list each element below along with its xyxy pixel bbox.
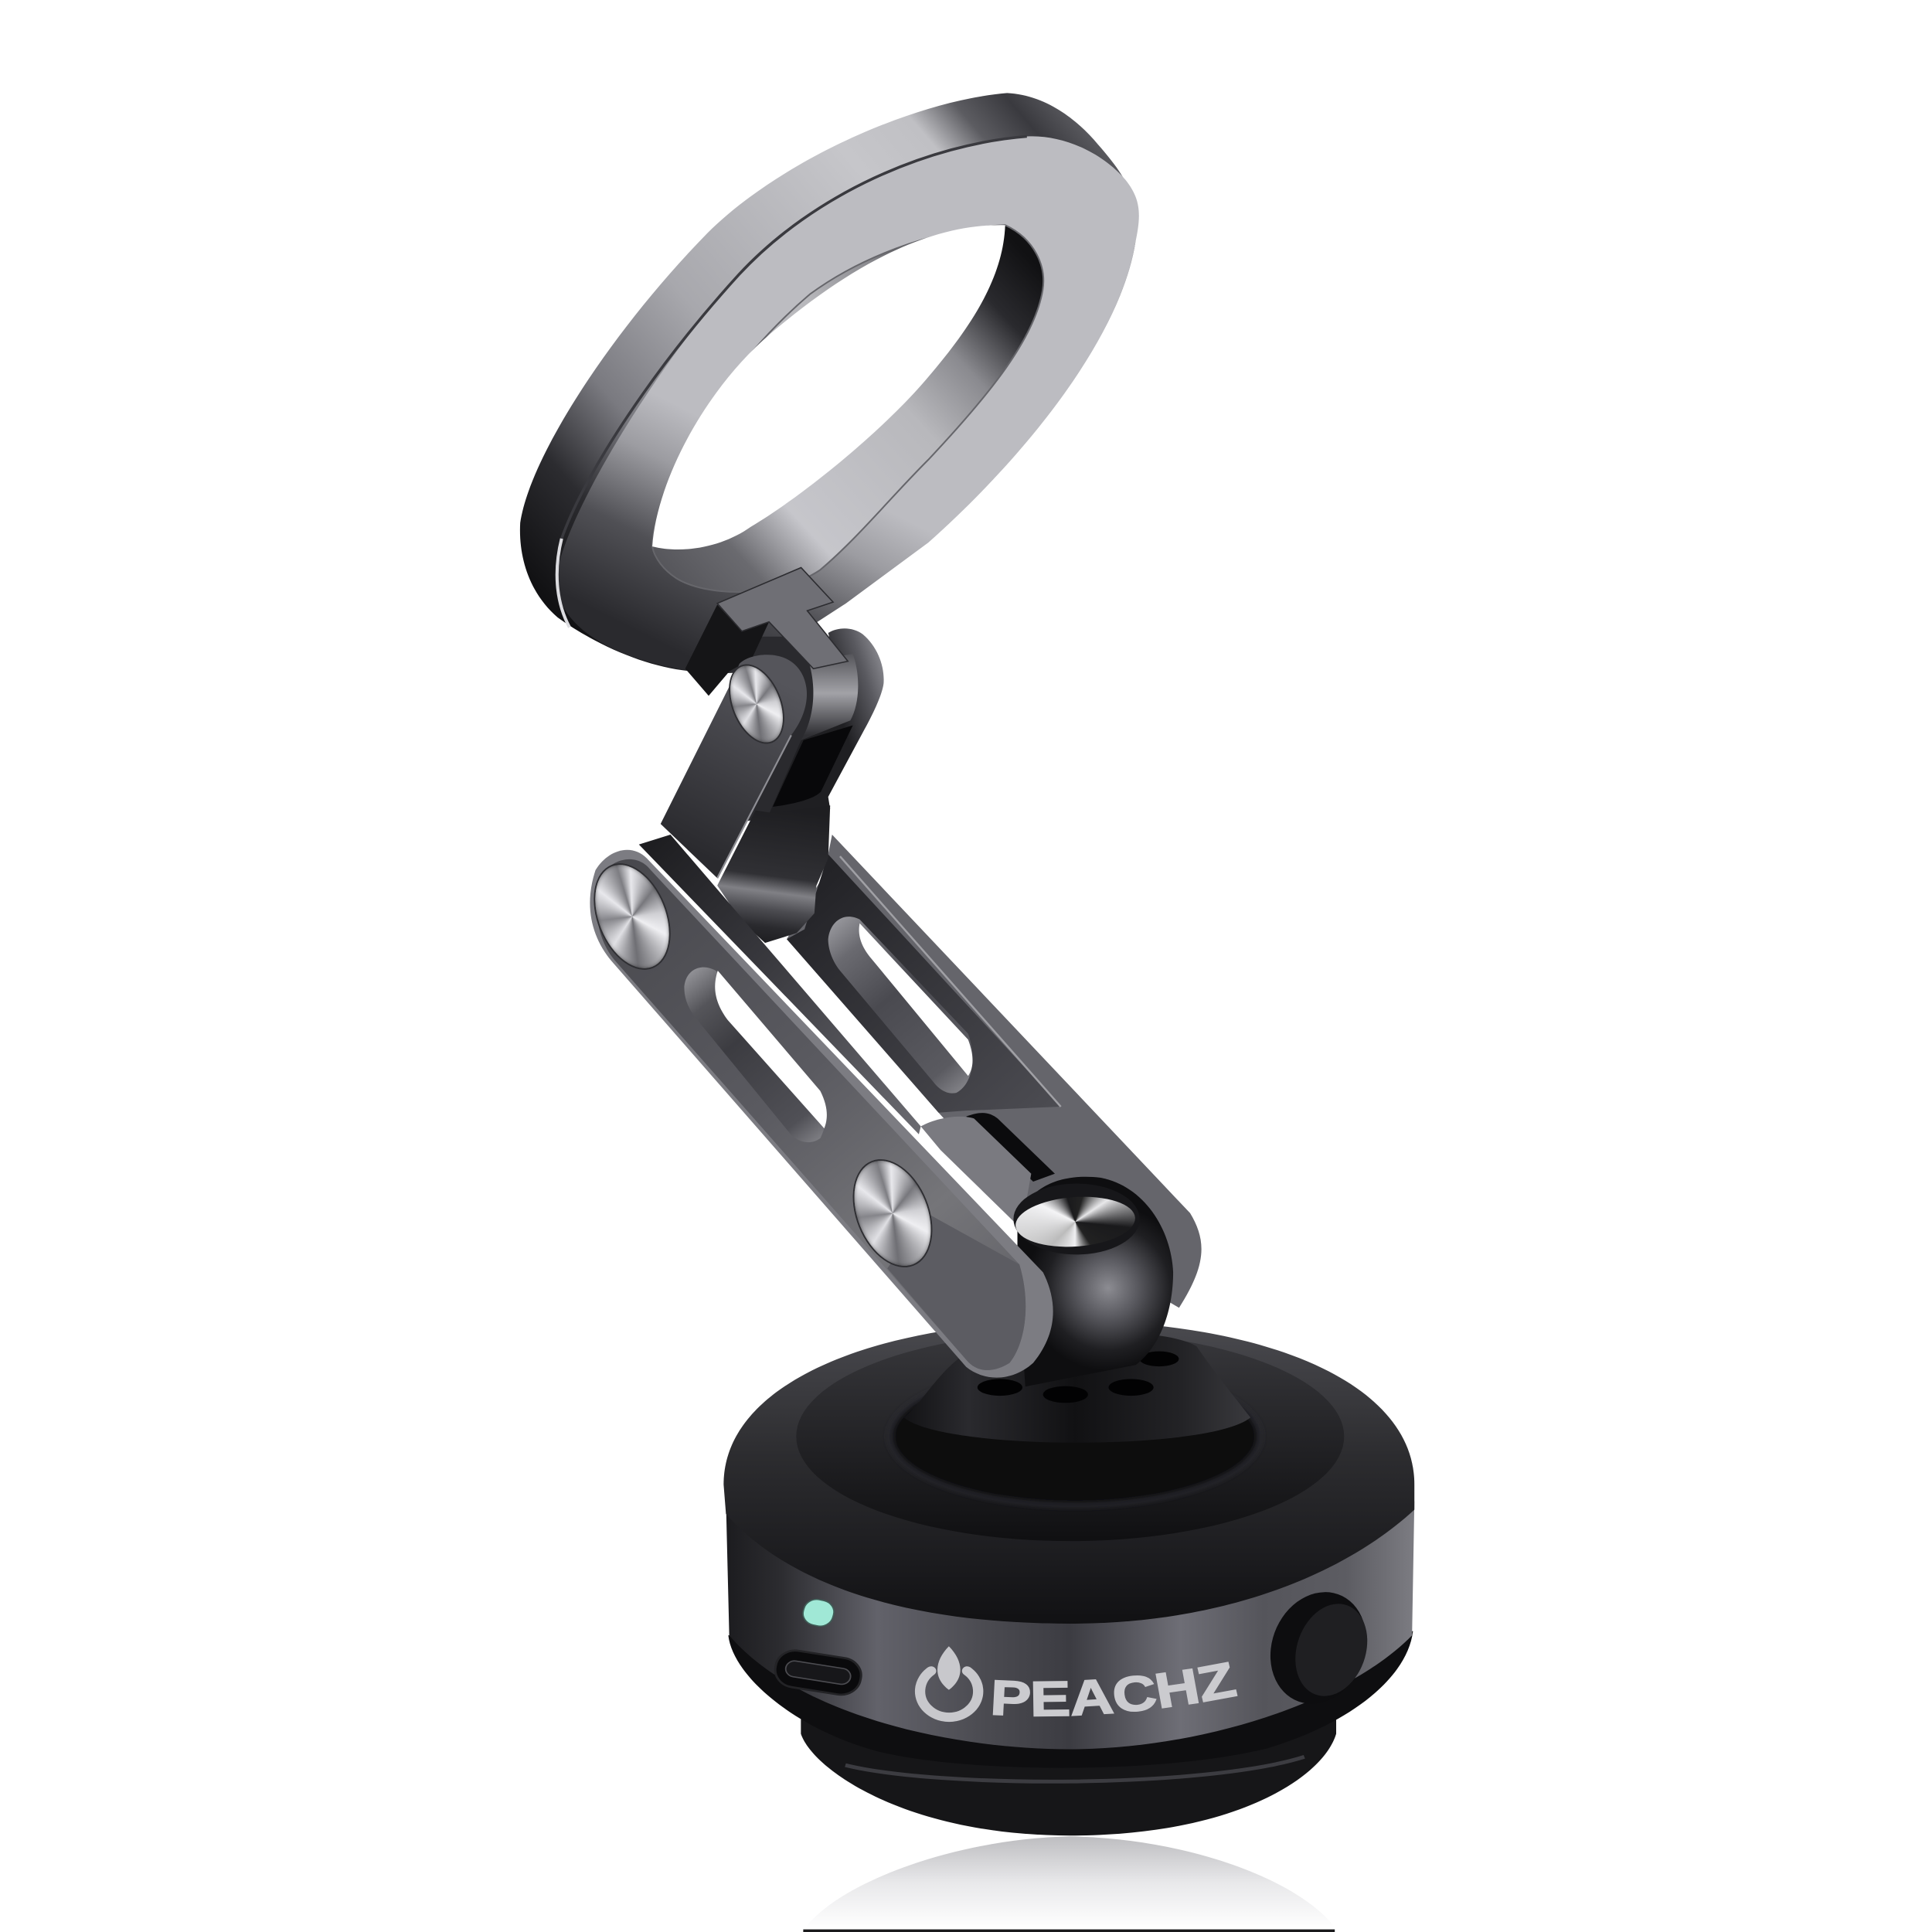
rear plate dark face — [787, 855, 1061, 1113]
mount ring — [889, 1367, 1260, 1505]
plate outline — [590, 850, 1053, 1378]
plate dark end — [887, 1213, 1026, 1370]
swivel ball and front plate — [590, 835, 1173, 1386]
pin: ball top — [1014, 1193, 1137, 1250]
mount cone — [904, 1332, 1250, 1443]
hinge backing — [744, 637, 853, 821]
socket block — [717, 805, 830, 943]
arm rear plate — [787, 835, 1202, 1308]
pin: arm top — [581, 854, 683, 979]
cap plateau — [796, 1332, 1344, 1541]
USB-C port — [772, 1648, 864, 1697]
knuckle — [921, 1117, 1031, 1229]
hinge barrel — [801, 654, 858, 740]
pin: upper hinge — [720, 658, 793, 750]
lower black rim — [728, 1631, 1413, 1768]
rear plate edge line — [840, 856, 1061, 1107]
ring ridge — [562, 137, 1027, 539]
foot highlight — [845, 1757, 1304, 1781]
logo wordmark: PEACHZ — [992, 1662, 1238, 1717]
hinge window — [773, 726, 853, 807]
swivel ball — [1018, 1177, 1173, 1386]
logo icon — [920, 1671, 978, 1717]
ring outer rim — [520, 93, 1137, 672]
status LED — [800, 1597, 837, 1628]
plate thickness side — [639, 835, 921, 1134]
ring front face — [556, 136, 1139, 673]
base unit — [723, 1326, 1414, 1836]
ring bracket side — [685, 604, 769, 696]
ring edge highlight — [557, 539, 570, 628]
ring inner wall — [652, 225, 1043, 592]
mount holes — [978, 1352, 1179, 1403]
hinge back plate — [769, 628, 884, 814]
base reflection — [803, 1836, 1337, 1932]
rear slot — [828, 917, 972, 1094]
ring hole — [652, 225, 1005, 549]
suction foot — [801, 1719, 1336, 1835]
ball socket shade — [1013, 1184, 1140, 1254]
upper link plate — [661, 655, 807, 878]
top cap — [723, 1321, 1414, 1624]
plate face — [597, 859, 1026, 1370]
link edge — [717, 735, 791, 878]
logo — [915, 1646, 1238, 1722]
ring bracket — [717, 567, 848, 668]
power button — [1257, 1583, 1380, 1713]
slit — [966, 1113, 1055, 1182]
metal band — [726, 1502, 1414, 1750]
front slot — [684, 968, 827, 1142]
pin: arm bottom — [840, 1149, 945, 1277]
hinge assembly — [661, 567, 884, 943]
magnetic ring — [520, 93, 1139, 673]
